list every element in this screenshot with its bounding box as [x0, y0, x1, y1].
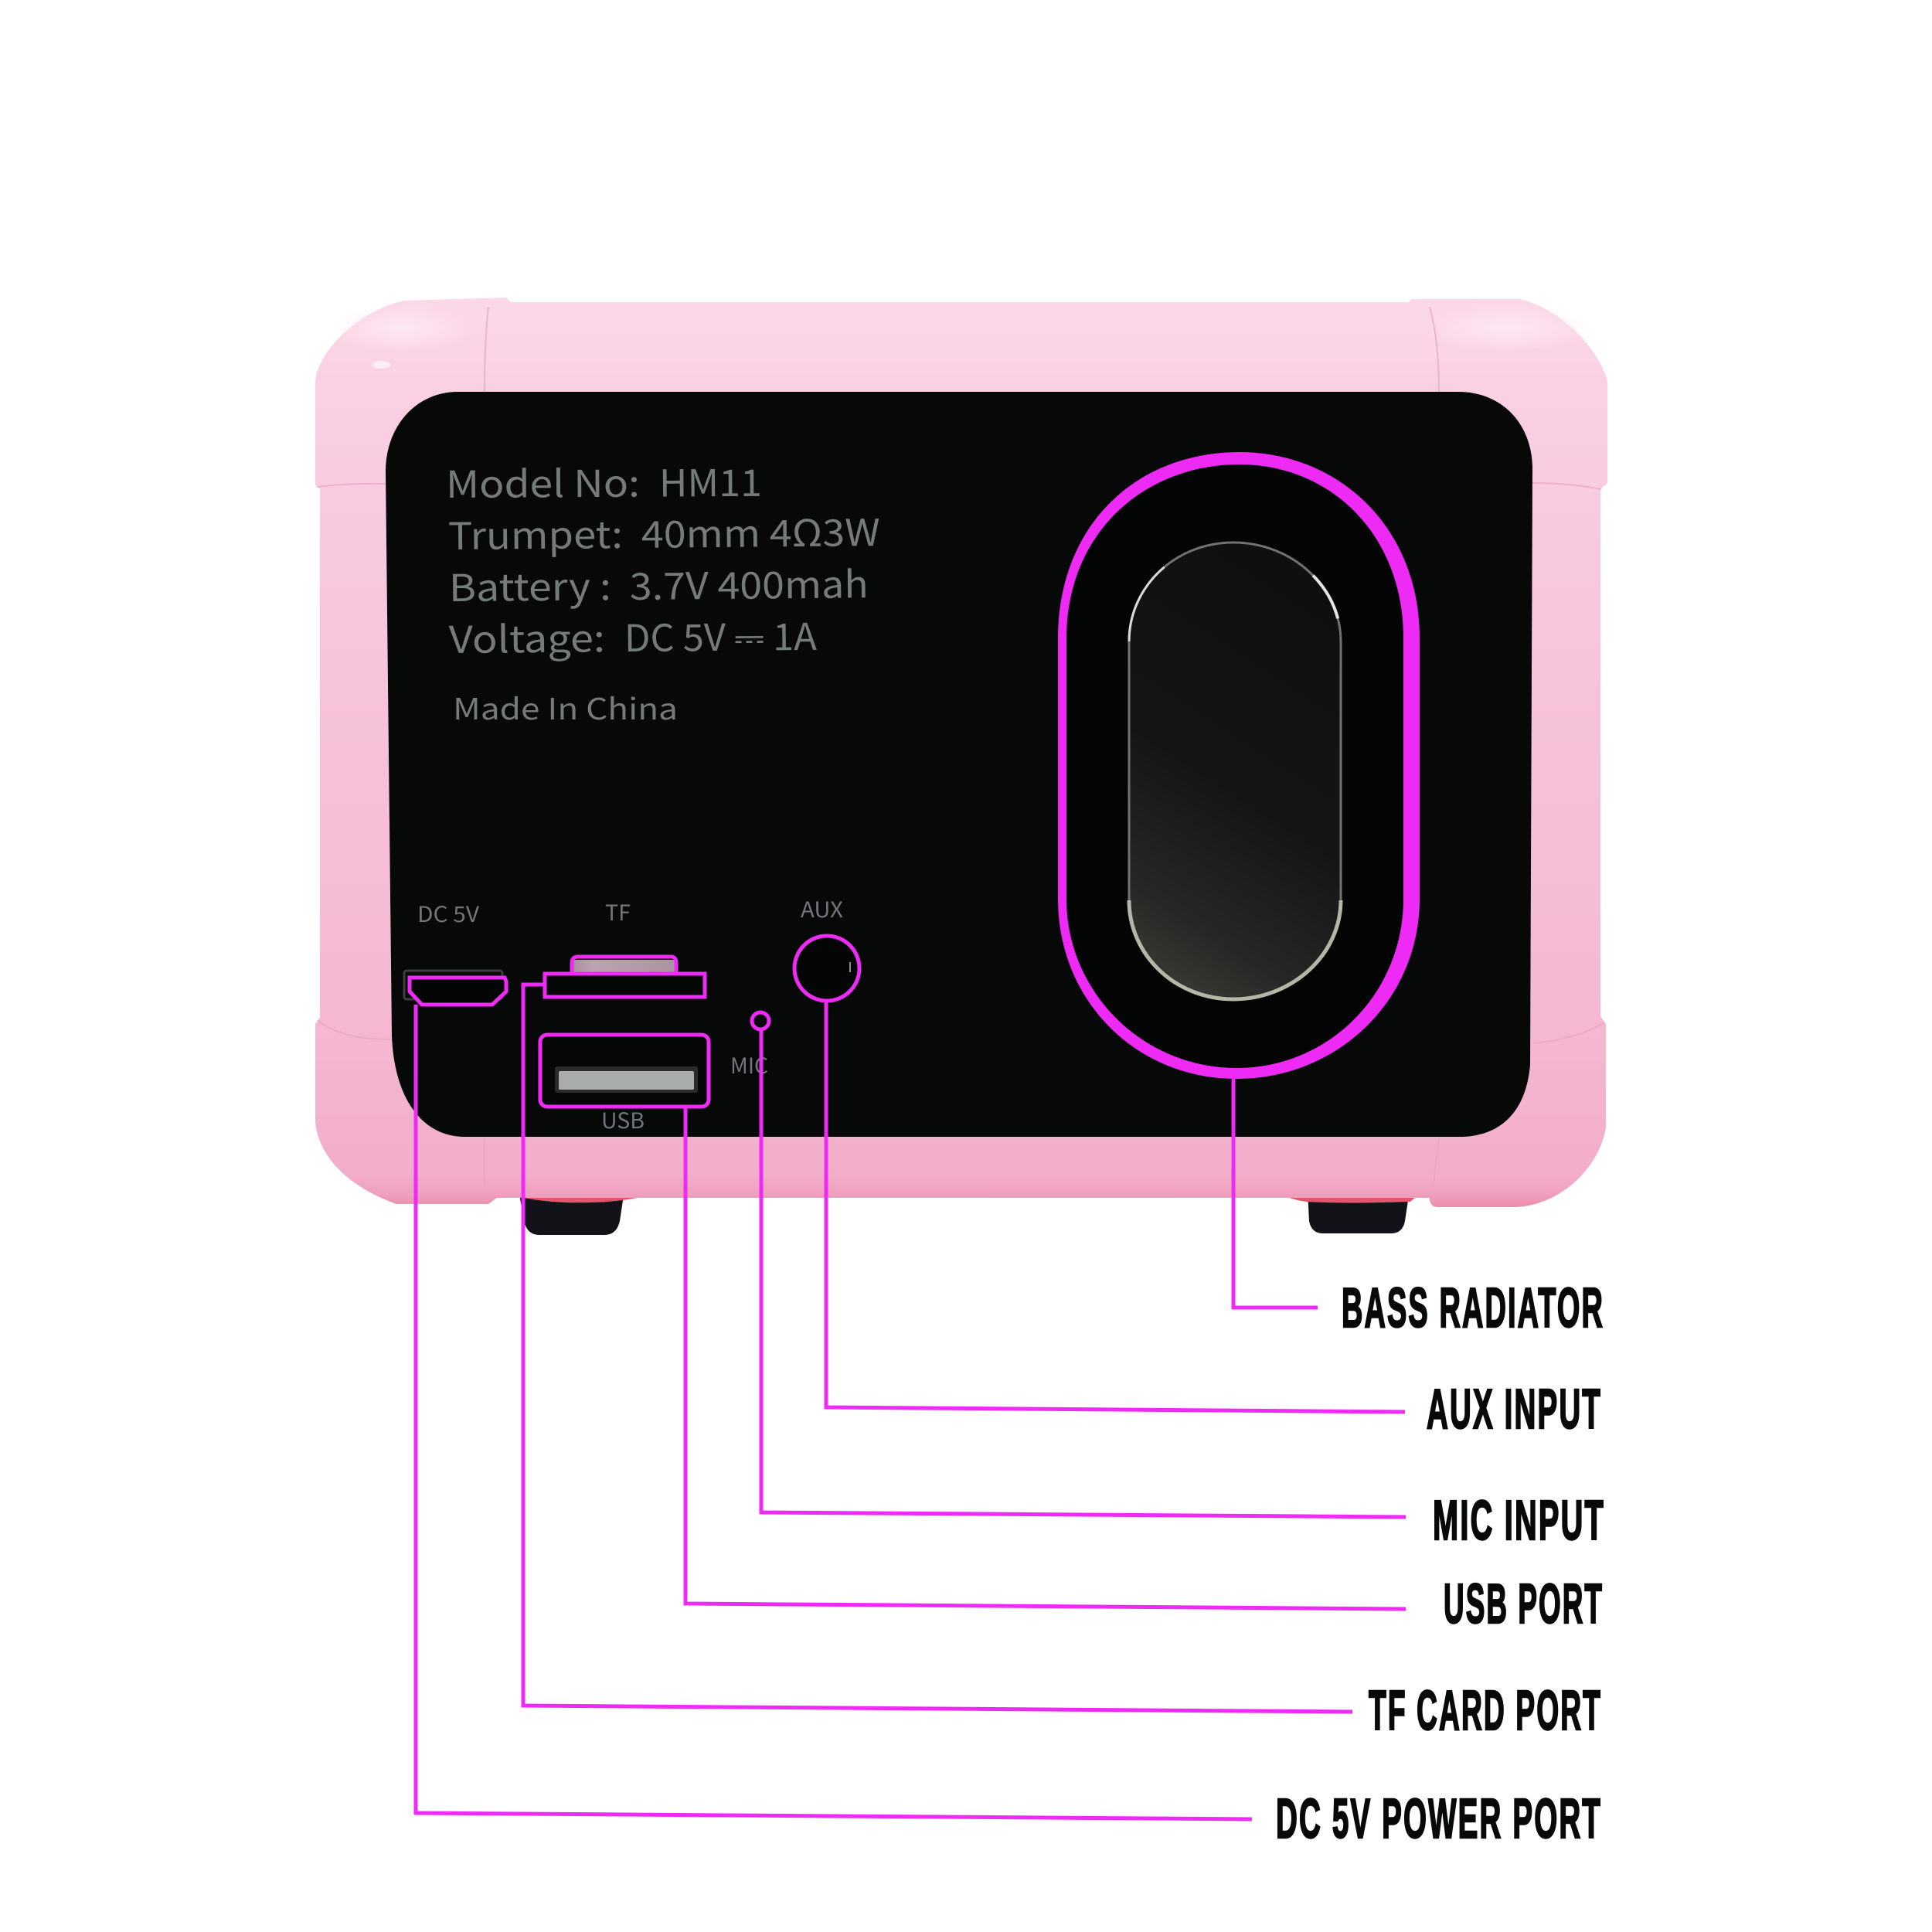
spec text block: 3.7V 400mah: [630, 554, 869, 611]
line: mic input: [761, 1030, 1406, 1517]
line: usb port: [685, 1107, 1406, 1609]
port labels: DC 5V: [417, 898, 480, 929]
body shell: [315, 298, 1607, 1207]
spec text block: DC 5V ⎓ 1A: [624, 607, 817, 662]
DC 5V port: [404, 971, 506, 1005]
line: dc 5v power port: [416, 1005, 1252, 1819]
radiator plate: [1129, 543, 1341, 999]
corner highlights: [1422, 305, 1592, 352]
label: usb port: USB PORT: [1444, 1573, 1604, 1635]
port labels: USB: [601, 1104, 645, 1135]
spec text block: HM11: [659, 453, 762, 508]
AUX port: [794, 936, 859, 1001]
line: bass radiator: [1233, 1079, 1318, 1308]
line: tf card port: [523, 985, 1352, 1712]
callout lines: [416, 985, 1406, 1819]
spec text block: Voltage:: [449, 608, 605, 664]
port labels: TF: [605, 896, 631, 927]
speaker body: [315, 298, 1607, 1207]
spec text block: Model No:: [446, 454, 640, 509]
radiator recess: [1069, 464, 1403, 1068]
label: aux input: AUX INPUT: [1427, 1379, 1602, 1440]
spec text block: 40mm 4Ω3W: [641, 502, 880, 559]
label: mic input: MIC INPUT: [1433, 1490, 1605, 1552]
radiator outline: [1058, 452, 1420, 1079]
USB port: [540, 1035, 709, 1107]
black back panel: [386, 392, 1532, 1137]
corner seams: [317, 307, 1604, 1202]
port labels: MIC: [730, 1049, 768, 1080]
spec text block: [446, 453, 880, 728]
line: aux input: [826, 1002, 1405, 1412]
speaker feet: [510, 1190, 1418, 1235]
label: tf card port: TF CARD PORT: [1369, 1680, 1602, 1742]
spec text block: Trumpet:: [448, 505, 623, 560]
radiator highlights: [1129, 543, 1341, 999]
port labels: [417, 893, 843, 1135]
spec text block: Made In China: [453, 685, 678, 728]
bass radiator: [1058, 452, 1420, 1079]
TF card port: [545, 957, 705, 997]
label: bass radiator: BASS RADIATOR: [1342, 1277, 1604, 1339]
MIC port: [752, 1012, 769, 1029]
spec text block: Battery :: [449, 556, 611, 612]
label: dc 5v power port: DC 5V POWER PORT: [1276, 1788, 1602, 1850]
port labels: AUX: [801, 893, 843, 924]
